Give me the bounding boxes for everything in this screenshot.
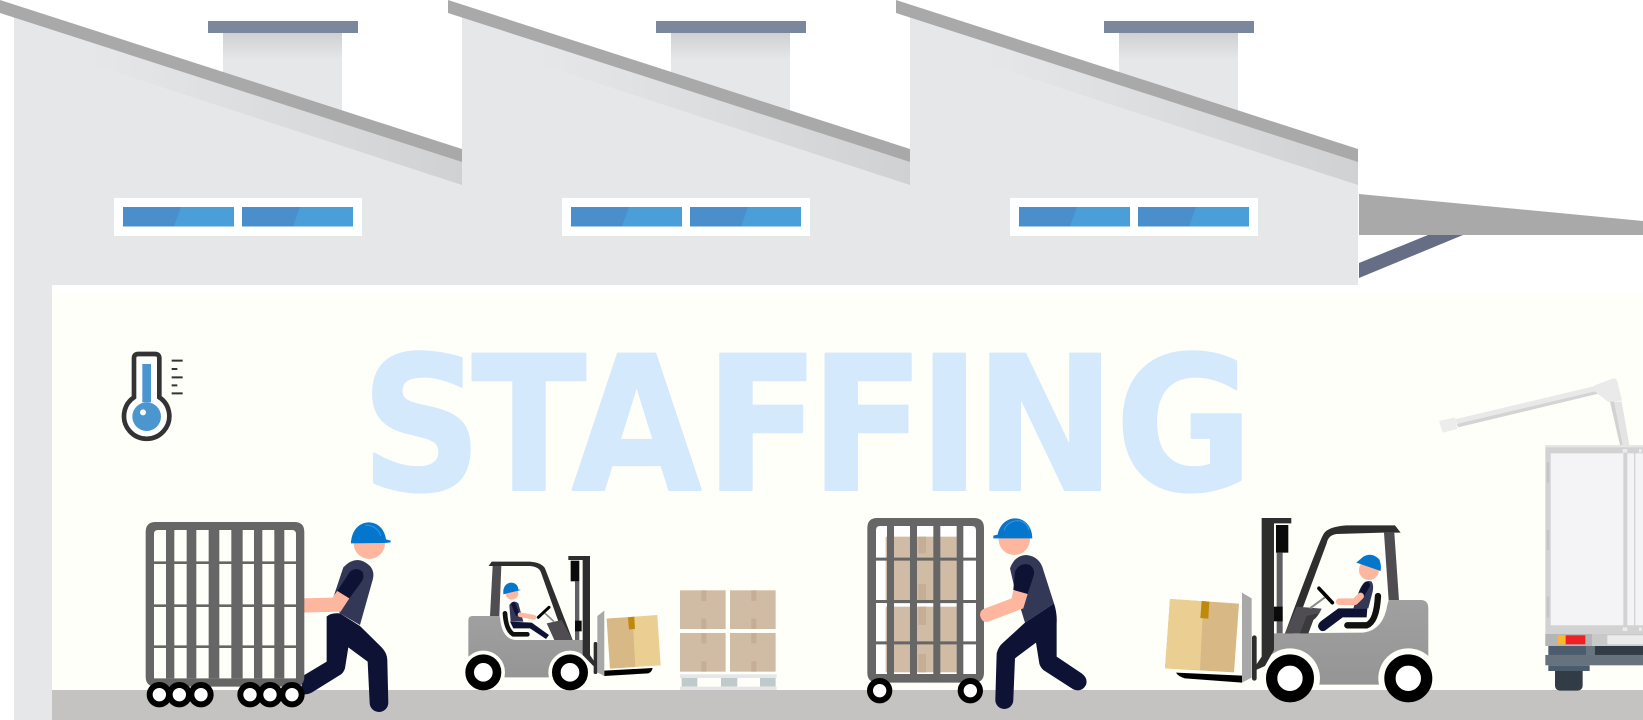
pallet of boxes (680, 590, 777, 690)
torso (333, 560, 373, 625)
wheel arches (1271, 648, 1428, 685)
forklift 1 with driver (462, 556, 661, 694)
wheel arches (468, 650, 584, 678)
truck rear (1545, 445, 1643, 691)
box (607, 615, 661, 669)
carriage (594, 611, 653, 676)
dashboard (1285, 607, 1322, 633)
carriage (1176, 593, 1257, 683)
sleeve (1013, 564, 1034, 594)
head (354, 528, 385, 559)
head (999, 524, 1030, 555)
window 1 (114, 198, 362, 236)
helmet (351, 522, 391, 543)
roof and front pillar (489, 562, 573, 640)
roof and front pillar (1285, 525, 1401, 633)
forklift 2 with driver (1165, 518, 1438, 708)
boxes in cart (876, 526, 976, 674)
steering (545, 613, 554, 622)
driver (503, 583, 549, 639)
arm (980, 590, 1028, 622)
seat (1347, 596, 1378, 625)
helmet (993, 518, 1032, 538)
body (468, 616, 583, 677)
legs (995, 603, 1087, 709)
window 2 (562, 198, 810, 236)
skylight chimneys (208, 21, 1254, 123)
wheels (1272, 660, 1427, 697)
interior background (52, 293, 1643, 690)
wheels (470, 659, 584, 686)
seat (505, 613, 527, 634)
icon: thermometer (124, 354, 183, 439)
worker pushing loaded cart (867, 518, 1087, 709)
arm (302, 591, 349, 613)
body (1271, 600, 1428, 685)
cart frame (867, 518, 984, 683)
roof shading (14, 17, 1358, 185)
box (1165, 599, 1239, 672)
floor (52, 690, 1643, 720)
loading arm (1439, 378, 1629, 445)
steering (1310, 597, 1325, 608)
legs (302, 613, 388, 712)
worker pushing empty cart (146, 522, 391, 712)
dashboard (547, 620, 573, 640)
saw-tooth roof bands (0, 0, 1358, 162)
rear pillar (490, 566, 501, 616)
mast (1255, 518, 1291, 670)
cart frame (146, 522, 304, 687)
rear pillar (1384, 533, 1399, 600)
driver (1318, 555, 1381, 631)
loading dock canopy (1359, 194, 1643, 278)
window 3 (1010, 198, 1258, 236)
sleeve (337, 569, 363, 598)
building wall (14, 17, 1358, 720)
heading: STAFFING: STAFFING (361, 317, 1253, 534)
cart wheels (150, 685, 302, 704)
torso (1010, 555, 1054, 623)
mast (568, 556, 596, 666)
cart wheels (870, 681, 980, 700)
